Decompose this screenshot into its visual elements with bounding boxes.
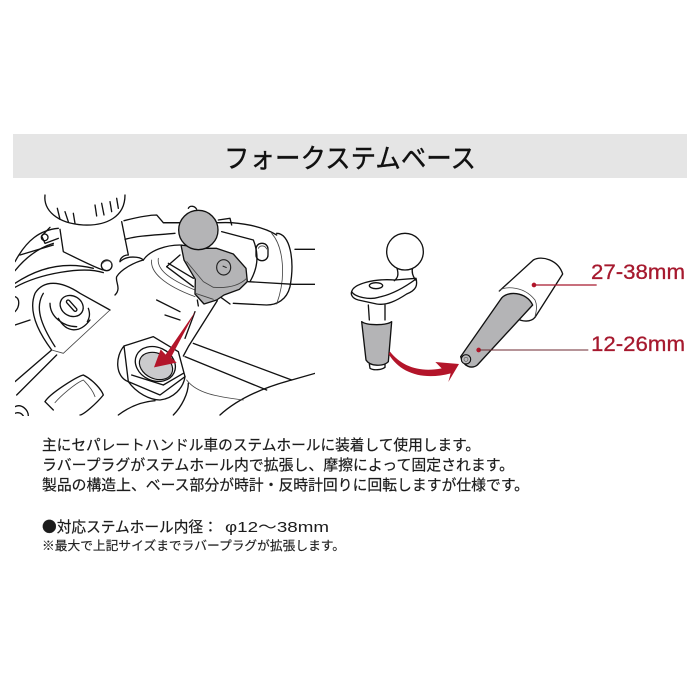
stem nut and hole	[118, 337, 185, 400]
footnote: ※最大で上記サイズまでラバープラグが拡張します。	[42, 538, 345, 553]
illustration: motorcycle fork stem installation	[15, 195, 315, 416]
title: フォークステムベース	[224, 144, 476, 174]
description text: ラバープラグがステムホール内で拡張し、摩擦によって固定されます。	[42, 457, 514, 474]
dimension label: 12-26mm: 12-26mm	[591, 333, 685, 356]
ball mount base	[351, 233, 423, 370]
lower frame lines	[118, 301, 315, 415]
dimension label: 27-38mm: 27-38mm	[591, 261, 685, 284]
leader line: lower diameter	[476, 348, 588, 352]
heading banner	[13, 134, 687, 178]
brake fluid reservoir	[45, 195, 128, 271]
triple clamp plate with keyhole	[15, 283, 110, 416]
red curved arrow	[389, 352, 459, 382]
specification: supported stem hole diameter	[42, 516, 329, 537]
specification: supported stem hole diameter: φ12〜38mm	[225, 519, 329, 536]
description text: 製品の構造上、ベース部分が時計・反時計回りに回転しますが仕様です。	[42, 477, 529, 494]
brake master cylinder and lever mount	[15, 215, 195, 320]
description text	[42, 437, 529, 494]
gray RAM ball base	[179, 206, 247, 306]
specification: supported stem hole diameter: ●対応ステムホール内径：	[42, 516, 218, 537]
description text: 主にセパレートハンドル車のステムホールに装着して使用します。	[42, 437, 480, 454]
red arrow into stem hole	[154, 311, 196, 367]
rubber plug	[461, 258, 563, 367]
leader line: upper diameter	[532, 283, 597, 287]
illustration: base assembly and rubber plug	[351, 233, 597, 382]
right clamp and handlebar	[163, 218, 315, 305]
